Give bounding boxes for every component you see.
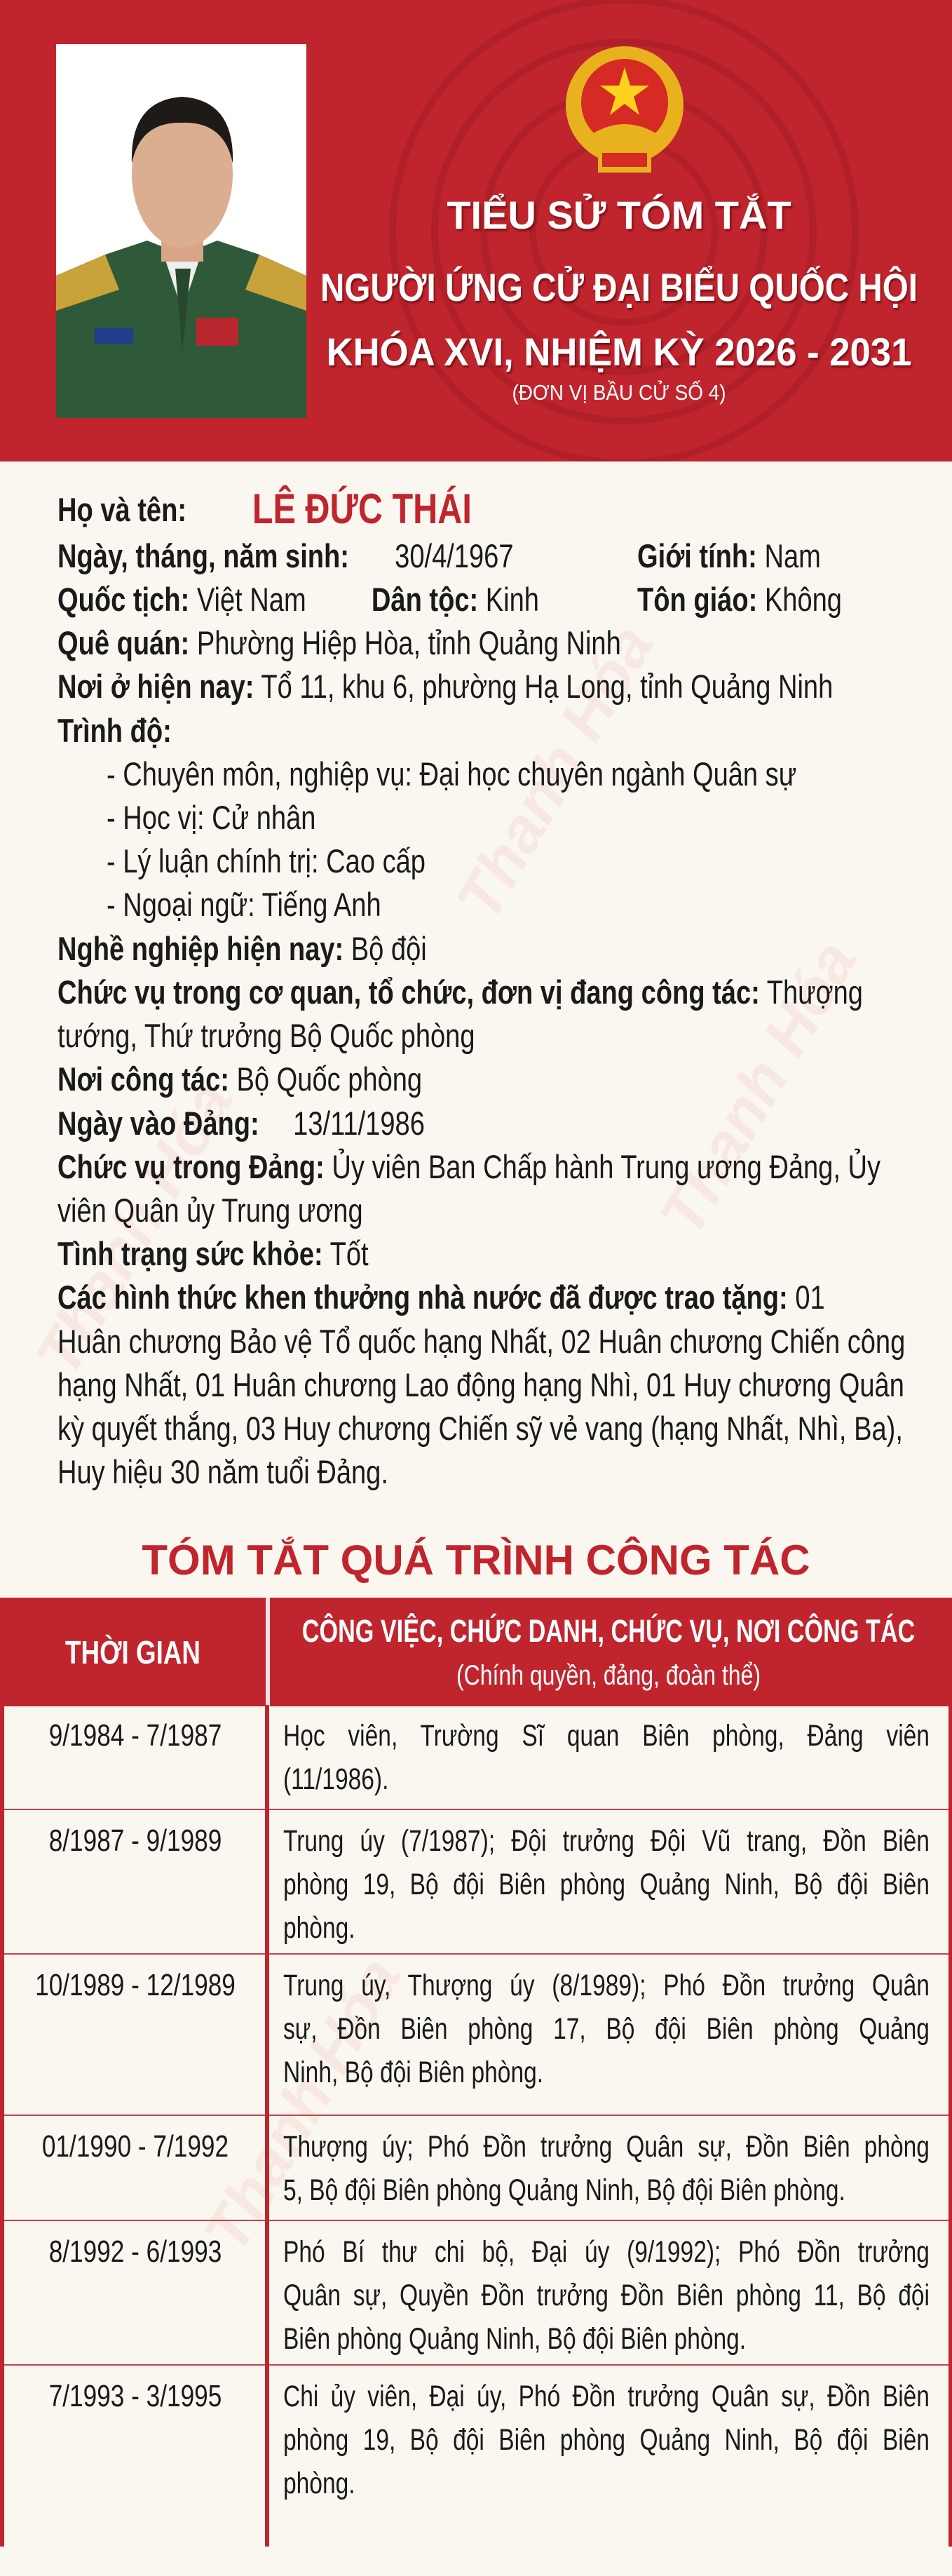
drum pattern background xyxy=(389,0,859,461)
row 6: 7/1993 - 3/1995 xyxy=(49,2379,222,2413)
text block: personal info xyxy=(57,537,905,1490)
row 6 xyxy=(49,2379,930,2500)
text block: personal info: Các hình thức khen thưởng nhà nước đã được trao tặng: 01 xyxy=(57,1279,825,1316)
table body xyxy=(0,1705,952,2547)
text: Thanh Hóa xyxy=(647,929,871,1247)
row 3: Trung úy, Thượng úy (8/1989); Phó Đồn trưởng Quân xyxy=(283,1969,930,2002)
text block: personal info: Tôn giáo: Không xyxy=(637,581,842,618)
text: LÊ ĐỨC THÁI xyxy=(252,485,472,532)
text block: personal info: Huy hiệu 30 năm tuổi Đảng. xyxy=(57,1453,388,1490)
row 5 xyxy=(0,2221,952,2366)
table header: THỜI GIAN xyxy=(65,1634,200,1671)
text block: personal info: Trình độ: xyxy=(57,712,172,749)
text block: personal info: Nơi ở hiện nay: Tổ 11, khu 6, phường Hạ Long, tỉnh Quảng Ninh xyxy=(57,668,833,705)
text block: personal info: - Ngoại ngữ: Tiếng Anh xyxy=(107,886,381,923)
text block: personal info: 13/11/1986 xyxy=(293,1105,425,1142)
text block: personal info: Dân tộc: Kinh xyxy=(372,581,539,618)
text block: personal info: Quê quán: Phường Hiệp Hòa, tỉnh Quảng Ninh xyxy=(57,624,621,661)
text block: personal info: viên Quân ủy Trung ương xyxy=(57,1192,363,1229)
row 5: Phó Bí thư chi bộ, Đại úy (9/1992); Phó Đồn trưởng xyxy=(283,2235,930,2269)
row 6: phòng. xyxy=(283,2467,355,2500)
row 1: (11/1986). xyxy=(283,1762,388,1796)
text block: personal info: 30/4/1967 xyxy=(395,537,514,574)
row 3: Ninh, Bộ đội Biên phòng. xyxy=(283,2056,543,2089)
name xyxy=(57,485,472,532)
row 5: Biên phòng Quảng Ninh, Bộ đội Biên phòng. xyxy=(283,2322,746,2356)
table header: CÔNG VIỆC, CHỨC DANH, CHỨC VỤ, NƠI CÔNG TÁC xyxy=(302,1613,915,1649)
name: Họ và tên: xyxy=(57,491,186,528)
text block: personal info: Giới tính: Nam xyxy=(637,537,821,574)
row 5: Quân sự, Quyền Đồn trưởng Đồn Biên phòng 11, Bộ đội xyxy=(283,2279,930,2312)
row 2: Trung úy (7/1987); Đội trưởng Đội Vũ trang, Đồn Biên xyxy=(283,1824,930,1858)
title: NGƯỜI ỨNG CỬ ĐẠI BIỂU QUỐC HỘI xyxy=(320,265,918,309)
text block: personal info: Tình trạng sức khỏe: Tốt xyxy=(57,1235,369,1272)
text block: personal info: Chức vụ trong Đảng: Ủy viên Ban Chấp hành Trung ương Đảng, Ủy xyxy=(57,1148,880,1185)
text block: personal info: Huân chương Bảo vệ Tổ quốc hạng Nhất, 02 Huân chương Chiến công xyxy=(57,1323,905,1360)
text block: personal info: Nơi công tác: Bộ Quốc phòng xyxy=(57,1060,422,1098)
text block: personal info: Quốc tịch: Việt Nam xyxy=(57,581,306,618)
header panel xyxy=(0,0,952,461)
watermark: Thanh Hóa xyxy=(444,614,667,931)
subtitle: (ĐƠN VỊ BẦU CỬ SỐ 4) xyxy=(512,380,726,405)
row 6: Chi ủy viên, Đại úy, Phó Đồn trưởng Quân sự, Đồn Biên xyxy=(283,2380,930,2413)
title xyxy=(320,193,918,405)
row 2: phòng. xyxy=(283,1911,355,1945)
text block: personal info: tướng, Thứ trưởng Bộ Quốc phòng xyxy=(57,1017,475,1054)
text block: personal info: - Học vị: Cử nhân xyxy=(107,799,315,836)
text block: personal info: kỳ quyết thắng, 03 Huy chương Chiến sỹ vẻ vang (hạng Nhất, Nhì, Ba), xyxy=(57,1410,903,1447)
text block: personal info: Ngày vào Đảng: xyxy=(57,1105,259,1142)
row 2: 8/1987 - 9/1989 xyxy=(49,1823,222,1858)
icon: national emblem xyxy=(566,46,684,173)
row 3: sự, Đồn Biên phòng 17, Bộ đội Biên phòng Quảng xyxy=(283,2012,930,2046)
row 4: 5, Bộ đội Biên phòng Quảng Ninh, Bộ đội Biên phòng. xyxy=(283,2173,845,2207)
row 2: phòng 19, Bộ đội Biên phòng Quảng Ninh, Bộ đội Biên xyxy=(283,1868,930,1901)
photo xyxy=(56,44,306,418)
text block: personal info: - Chuyên môn, nghiệp vụ: Đại học chuyên ngành Quân sự xyxy=(107,755,796,793)
row 3: 10/1989 - 12/1989 xyxy=(35,1968,236,2002)
table xyxy=(0,1598,952,2547)
table header xyxy=(0,1598,952,1706)
row 2 xyxy=(0,1810,952,1955)
text: Thanh Hóa xyxy=(191,1946,415,2264)
row 3 xyxy=(0,1955,952,2116)
table header: (Chính quyền, đảng, đoàn thể) xyxy=(456,1660,761,1691)
row 6: phòng 19, Bộ đội Biên phòng Quảng Ninh, Bộ đội Biên xyxy=(283,2423,930,2457)
text block: personal info: hạng Nhất, 01 Huân chương Lao động hạng Nhì, 01 Huy chương Quân xyxy=(57,1366,904,1403)
text: Thanh Hóa xyxy=(23,1070,247,1387)
text block: personal info: - Lý luận chính trị: Cao cấp xyxy=(107,842,426,879)
row 4: 01/1990 - 7/1992 xyxy=(42,2129,229,2164)
title: KHÓA XVI, NHIỆM KỲ 2026 - 2031 xyxy=(327,330,911,374)
text block: personal info: Chức vụ trong cơ quan, tổ chức, đơn vị đang công tác: Thượng xyxy=(57,973,863,1011)
row 1 xyxy=(0,1705,952,1810)
row 1: 9/1984 - 7/1987 xyxy=(49,1718,222,1753)
row 5: 8/1992 - 6/1993 xyxy=(49,2234,222,2269)
title: TIỂU SỬ TÓM TẮT xyxy=(447,193,791,237)
row 4: Thượng úy; Phó Đồn trưởng Quân sự, Đồn Biên phòng xyxy=(283,2130,930,2164)
section heading: TÓM TẮT QUÁ TRÌNH CÔNG TÁC xyxy=(142,1537,810,1584)
row 4 xyxy=(0,2116,952,2221)
text block: personal info: Nghề nghiệp hiện nay: Bộ đội xyxy=(57,930,427,967)
text block: personal info: Ngày, tháng, năm sinh: xyxy=(57,537,349,574)
row 1: Học viên, Trường Sĩ quan Biên phòng, Đảng viên xyxy=(283,1719,930,1753)
